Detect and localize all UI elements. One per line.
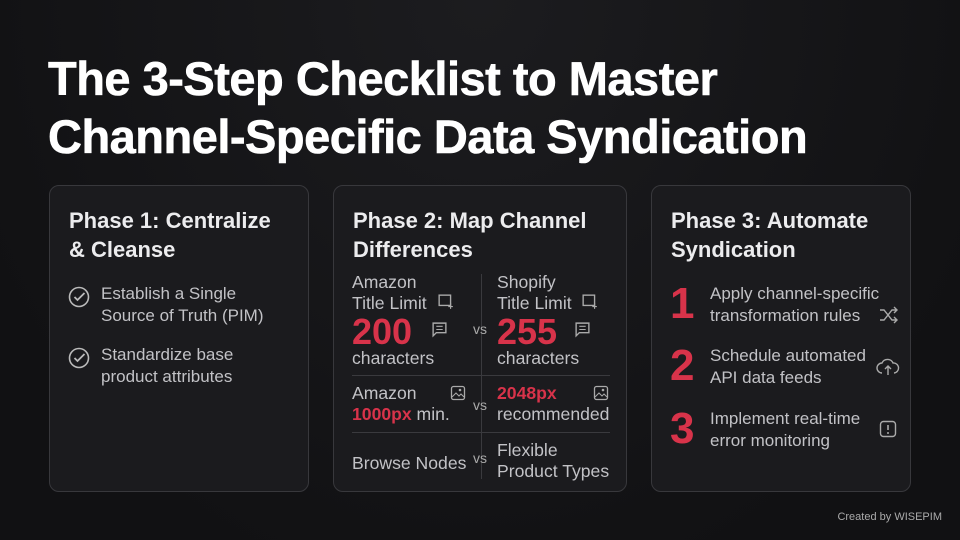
panel: phase 3 <box>651 185 911 492</box>
title: Channel-Specific Data Syndication <box>48 110 807 163</box>
step 3: Implement real-time <box>710 409 860 428</box>
checklist item 2: Standardize base <box>101 345 233 364</box>
checklist item 1 <box>68 284 264 325</box>
heading: phase 1 <box>69 208 271 262</box>
comparison: title limit: vs <box>473 321 487 337</box>
step 2 <box>670 341 900 390</box>
step 1: 1 <box>670 279 694 328</box>
title: The 3-Step Checklist to Master <box>48 52 717 105</box>
step 3 <box>670 404 896 453</box>
comparison: title limit: Amazon <box>352 272 417 292</box>
comparison: image size: 2048px <box>497 383 557 403</box>
checklist item 1: Source of Truth (PIM) <box>101 306 264 325</box>
comparison: taxonomy: Flexible <box>497 440 558 460</box>
comparison: title limit: Shopify <box>497 272 556 292</box>
comparison: image size: Amazon <box>352 383 417 403</box>
heading: phase 1: Phase 1: Centralize <box>69 208 271 233</box>
step 1: transformation rules <box>710 306 860 325</box>
comparison: taxonomy <box>352 440 609 481</box>
comparison: title limit: characters <box>352 348 434 368</box>
checklist item 2: product attributes <box>101 367 232 386</box>
comparison: title limit: Title Limit <box>352 293 427 313</box>
step 3: 3 <box>670 404 694 453</box>
heading: phase 2: Differences <box>353 237 473 262</box>
checklist item 1: Establish a Single <box>101 284 236 303</box>
heading: phase 2 <box>353 208 587 262</box>
comparison: title limit: characters <box>497 348 579 368</box>
step 2: 2 <box>670 341 694 390</box>
footer credit: Created by WISEPIM <box>837 511 942 523</box>
comparison: title limit: 200 <box>352 311 412 352</box>
comparison: title limit: Title Limit <box>497 293 572 313</box>
title <box>48 52 807 164</box>
comparison: taxonomy: vs <box>473 450 487 466</box>
comparison: image size <box>352 383 609 424</box>
step 1: Apply channel-specific <box>710 284 879 303</box>
comparison: title limit: 255 <box>497 311 557 352</box>
panel: phase 1 <box>49 185 309 492</box>
comparison: image size: vs <box>473 397 487 413</box>
step 3: error monitoring <box>710 431 830 450</box>
step 1 <box>670 279 898 328</box>
panel: phase 2 <box>333 185 627 492</box>
step 2: API data feeds <box>710 368 822 387</box>
heading: phase 1: & Cleanse <box>69 237 175 262</box>
heading: phase 3: Syndication <box>671 237 796 262</box>
heading: phase 2: Phase 2: Map Channel <box>353 208 587 233</box>
comparison: image size: 1000px min. <box>352 404 450 424</box>
heading: phase 3: Phase 3: Automate <box>671 208 868 233</box>
step 2: Schedule automated <box>710 346 866 365</box>
comparison: taxonomy: Browse Nodes <box>352 453 466 473</box>
checklist item 2 <box>68 345 233 386</box>
comparison: image size: recommended <box>497 404 609 424</box>
comparison: title limit <box>352 272 597 368</box>
comparison: taxonomy: Product Types <box>497 461 609 481</box>
heading: phase 3 <box>671 208 868 262</box>
